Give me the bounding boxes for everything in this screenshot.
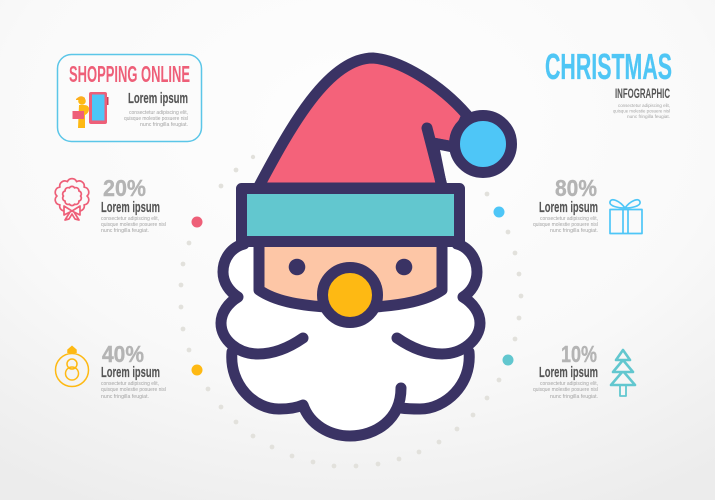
marker: red dot [192,216,202,228]
body text: consectetur adipiscing elit, [129,110,188,116]
panel: shopping online [58,54,202,142]
title body text [613,103,670,119]
subtitle: infographic: INFOGRAPHIC [615,85,670,101]
item: 40% [56,341,166,400]
label: Lorem ipsum [539,199,598,216]
body text: quisque molestie posuere nisl [533,222,598,228]
eye right [396,259,412,275]
beard [221,244,480,436]
body text: nunc fringilla feugiat. [101,394,149,400]
pompom [454,116,512,172]
icon: shopper and phone [72,92,108,128]
dotted ring [179,155,523,468]
marker: blue dot [494,206,504,218]
body text [533,216,598,234]
body text: consectetur adipiscing elit, [101,381,159,387]
body text: nunc fringilla feugiat. [550,394,598,400]
body text [124,110,188,128]
item: 20% [55,175,166,234]
title body text: consectetur adipiscing elit, [618,103,670,108]
body text: quisque molestie posuere nisl [533,387,598,393]
value: 10% [561,341,597,367]
hat fold [427,128,455,186]
title body text: quisque molestie posuere nisl [613,108,670,114]
body text [101,216,166,234]
nose [322,268,378,322]
label: lorem ipsum: Lorem ipsum [128,90,188,107]
item: 80% [533,175,642,234]
body text: nunc fringilla feugiat. [140,122,188,128]
item: 10% [533,341,635,400]
title body text: nunc fringilla feugiat. [627,114,670,119]
icon: christmas tree [611,350,635,396]
icon: gift box [610,200,642,234]
body text: consectetur adipiscing elit, [540,216,598,222]
label: Lorem ipsum [101,199,160,216]
label: Lorem ipsum [101,364,160,381]
body text [101,381,166,400]
value: 20% [103,175,146,201]
hat [258,58,467,188]
body text: quisque molestie posuere nisl [101,387,166,393]
hat band [242,188,460,242]
body text: consectetur adipiscing elit, [101,216,159,222]
heading: shopping online: SHOPPING ONLINE [69,61,190,87]
marker: teal dot [502,354,514,366]
santa illustration [221,58,512,436]
value: 80% [555,175,597,201]
label: Lorem ipsum [539,364,598,381]
body text: quisque molestie posuere nisl [124,116,188,122]
icon: snowman ornament [56,346,88,386]
eye left [289,259,305,275]
body text: nunc fringilla feugiat. [550,228,598,234]
body text: consectetur adipiscing elit, [540,381,598,387]
body text: quisque molestie posuere nisl [101,222,166,228]
body text [533,381,598,400]
icon: wreath [55,179,89,220]
body text: nunc fringilla feugiat. [101,228,149,234]
face [259,240,442,307]
value: 40% [102,341,144,367]
marker: yellow dot [192,364,202,376]
